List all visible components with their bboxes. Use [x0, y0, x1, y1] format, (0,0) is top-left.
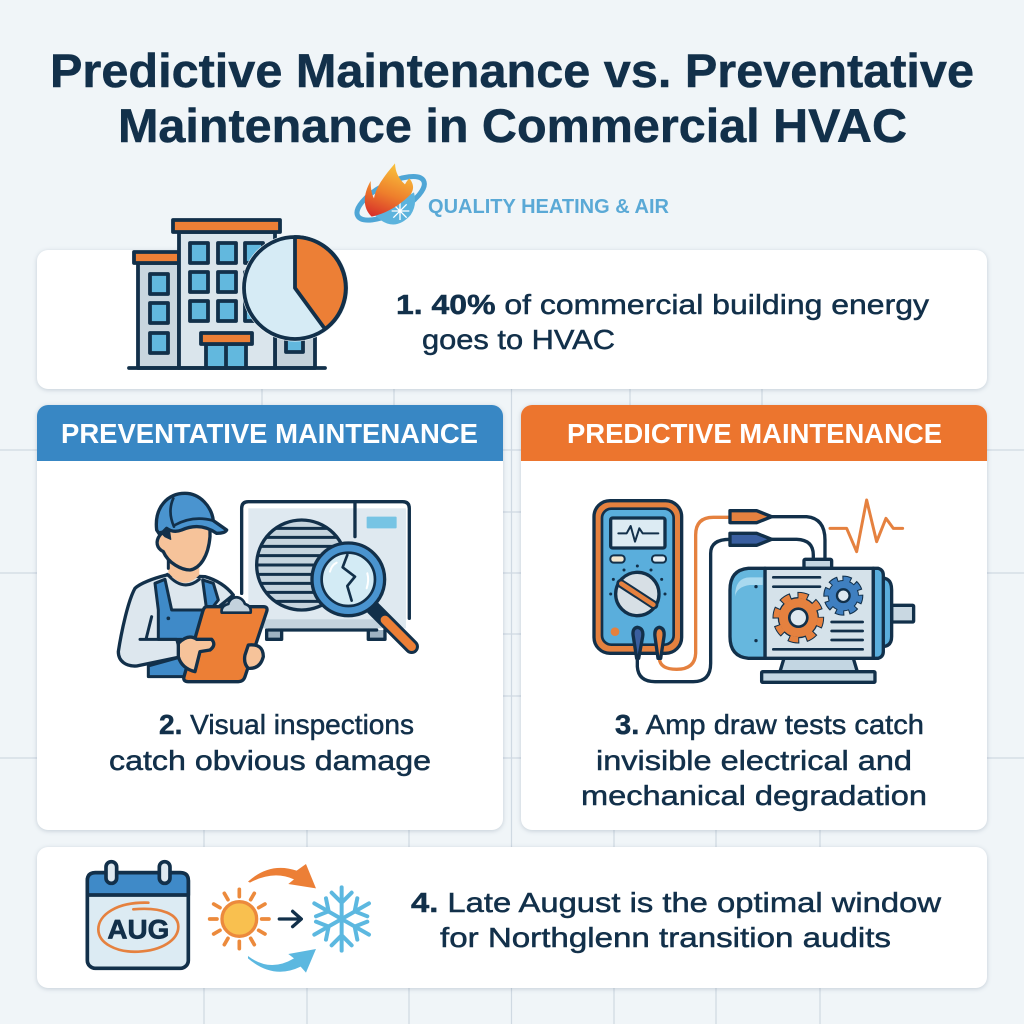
text: point 4 [411, 887, 942, 953]
heading: preventative: PREVENTATIVE MAINTENANCE [61, 418, 478, 449]
icon: sun to snowflake transition [210, 864, 369, 973]
text: point 2: 2. Visual inspections [159, 709, 414, 740]
icon: calendar August: AUG [107, 915, 169, 945]
icon: multimeter testing motor [594, 500, 914, 682]
arrow: orange curve [248, 864, 316, 888]
text: point 3 [581, 709, 927, 811]
heading: predictive: PREDICTIVE MAINTENANCE [567, 418, 942, 449]
motor [730, 559, 914, 682]
panel: predictive maintenance [521, 405, 987, 830]
title: Maintenance in Commercial HVAC [118, 99, 907, 152]
title [50, 44, 974, 152]
sun [210, 889, 269, 949]
text: point 4: 4. Late August is the optimal window [411, 887, 942, 918]
icon: calendar August [87, 862, 188, 968]
text: point 3: 3. Amp draw tests catch [615, 709, 924, 740]
logo: Quality Heating & Air [351, 163, 669, 229]
arrow: blue curve [248, 949, 316, 973]
technician [118, 493, 267, 682]
multimeter [594, 501, 682, 653]
icon: technician inspecting AC unit [118, 493, 412, 682]
text: point 4: for Northglenn transition audits [440, 922, 891, 953]
text: point 3: invisible electrical and [596, 745, 912, 776]
pulse waveform [830, 500, 903, 552]
panel: preventative maintenance [37, 405, 503, 830]
text: point 3: mechanical degradation [581, 780, 927, 811]
title: Predictive Maintenance vs. Preventative [50, 44, 974, 97]
panel: seasonal timing [37, 847, 987, 988]
gear: orange [776, 596, 820, 640]
text: point 1 [396, 289, 929, 355]
AC unit with magnifier [242, 502, 412, 647]
text: point 2: catch obvious damage [109, 745, 431, 776]
snowflake [314, 887, 369, 951]
arrow: to cooling [279, 911, 301, 927]
text: point 2 [109, 709, 431, 776]
panel: energy statistic [37, 220, 987, 389]
text: point 1: goes to HVAC [422, 324, 615, 355]
icon: buildings with pie chart [129, 220, 348, 368]
logo: Quality Heating & Air: QUALITY HEATING & AIR [428, 195, 669, 218]
gear: blue [827, 579, 860, 612]
text: point 1: 1. 40% of commercial building energy [396, 289, 929, 320]
heading: preventative [37, 405, 503, 461]
heading: predictive [521, 405, 987, 461]
pie chart: 40% share [244, 237, 346, 339]
